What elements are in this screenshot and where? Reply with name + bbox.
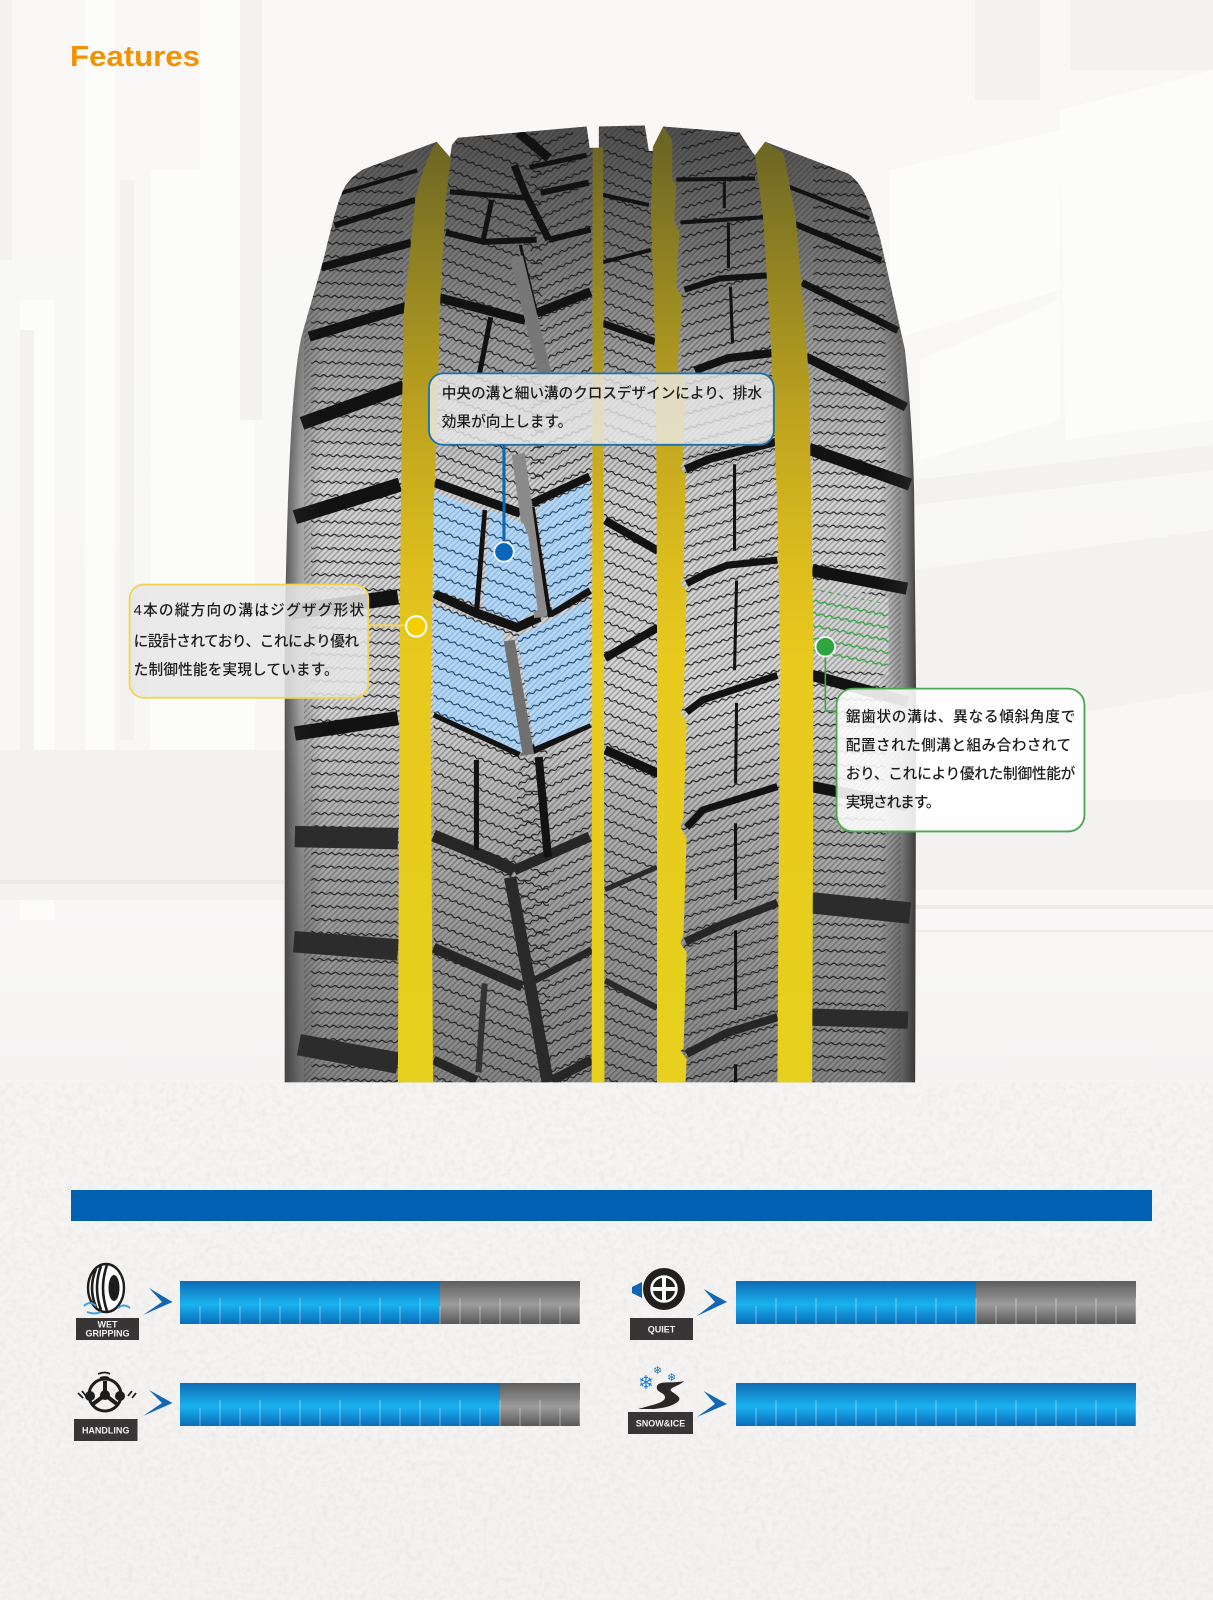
callout: zigzag grooves: 4本の縦方向の溝はジグザグ形状 [134,601,365,619]
icon: snow road: ❄ [653,1364,662,1377]
callout: center groove: 中央の溝と細い溝のクロスデザインにより、排水 [442,384,762,402]
blue header band [71,1190,1152,1221]
left shoulder lateral grooves [342,170,417,193]
callout: zigzag grooves: に設計されており、これにより優れ [134,633,359,650]
label: SNOW&amp;ICE: SNOW&ICE [636,1418,685,1428]
right shoulder lateral grooves [789,187,869,218]
callout: saw-tooth sipes: おり、これにより優れた制御性能が [846,764,1076,782]
label: HANDLING [74,1419,138,1441]
yellow zigzag circumferential grooves [398,127,813,1082]
icon: snow road: ❄ [667,1371,676,1384]
callout: zigzag grooves [130,585,368,698]
bar: 13 of 20 [180,1281,580,1324]
connector: saw-tooth marker [816,637,837,711]
label: SNOW&amp;ICE [628,1412,693,1434]
center-left chevrons [518,133,549,158]
arrow [143,1288,172,1315]
tire tread illustration [130,112,1084,1092]
icon: quiet wheel with speaker [632,1268,685,1310]
icon: snow road: ❄ [638,1372,654,1394]
callout: center groove [429,373,774,445]
icon: wet gripping tire [84,1264,130,1314]
center-right lateral grooves [603,195,649,205]
connector: zigzag groove marker [368,616,426,637]
callout: saw-tooth sipes [837,689,1084,831]
performance rating: handling [74,1372,580,1441]
label: QUIET: QUIET [648,1324,676,1334]
arrow [697,1289,727,1316]
bar: 20 of 20 [736,1383,1136,1426]
icon: handling steering wheel [78,1372,136,1411]
callout: saw-tooth sipes: 実現されます。 [846,794,941,811]
arrow [697,1391,727,1417]
callout: saw-tooth sipes: 配置された側溝と組み合わされて [846,736,1071,754]
performance rating: wet gripping [76,1264,580,1340]
heading: Features: Features [70,41,200,73]
label: QUIET [630,1318,693,1340]
label: HANDLING: HANDLING [82,1426,129,1436]
callout: center groove: 効果が向上します。 [442,412,572,430]
label: WET GRIPPING [76,1318,139,1340]
callout: zigzag grooves: た制御性能を実現しています。 [134,661,339,678]
connector: center groove marker [494,445,514,562]
bar: 16 of 20 [180,1383,580,1426]
performance rating: quiet [630,1268,1136,1340]
arrow [143,1390,172,1416]
highlighted green sipes [813,584,889,675]
highlighted blue tread blocks [434,482,590,753]
label: WET GRIPPING: GRIPPING [85,1328,130,1338]
bar: 12 of 20 [736,1281,1136,1324]
callout: saw-tooth sipes: 鋸歯状の溝は、異なる傾斜角度で [846,707,1075,725]
label: WET GRIPPING: WET [98,1320,118,1330]
icon: snow road [638,1364,684,1409]
performance rating: snow and ice [628,1364,1136,1434]
